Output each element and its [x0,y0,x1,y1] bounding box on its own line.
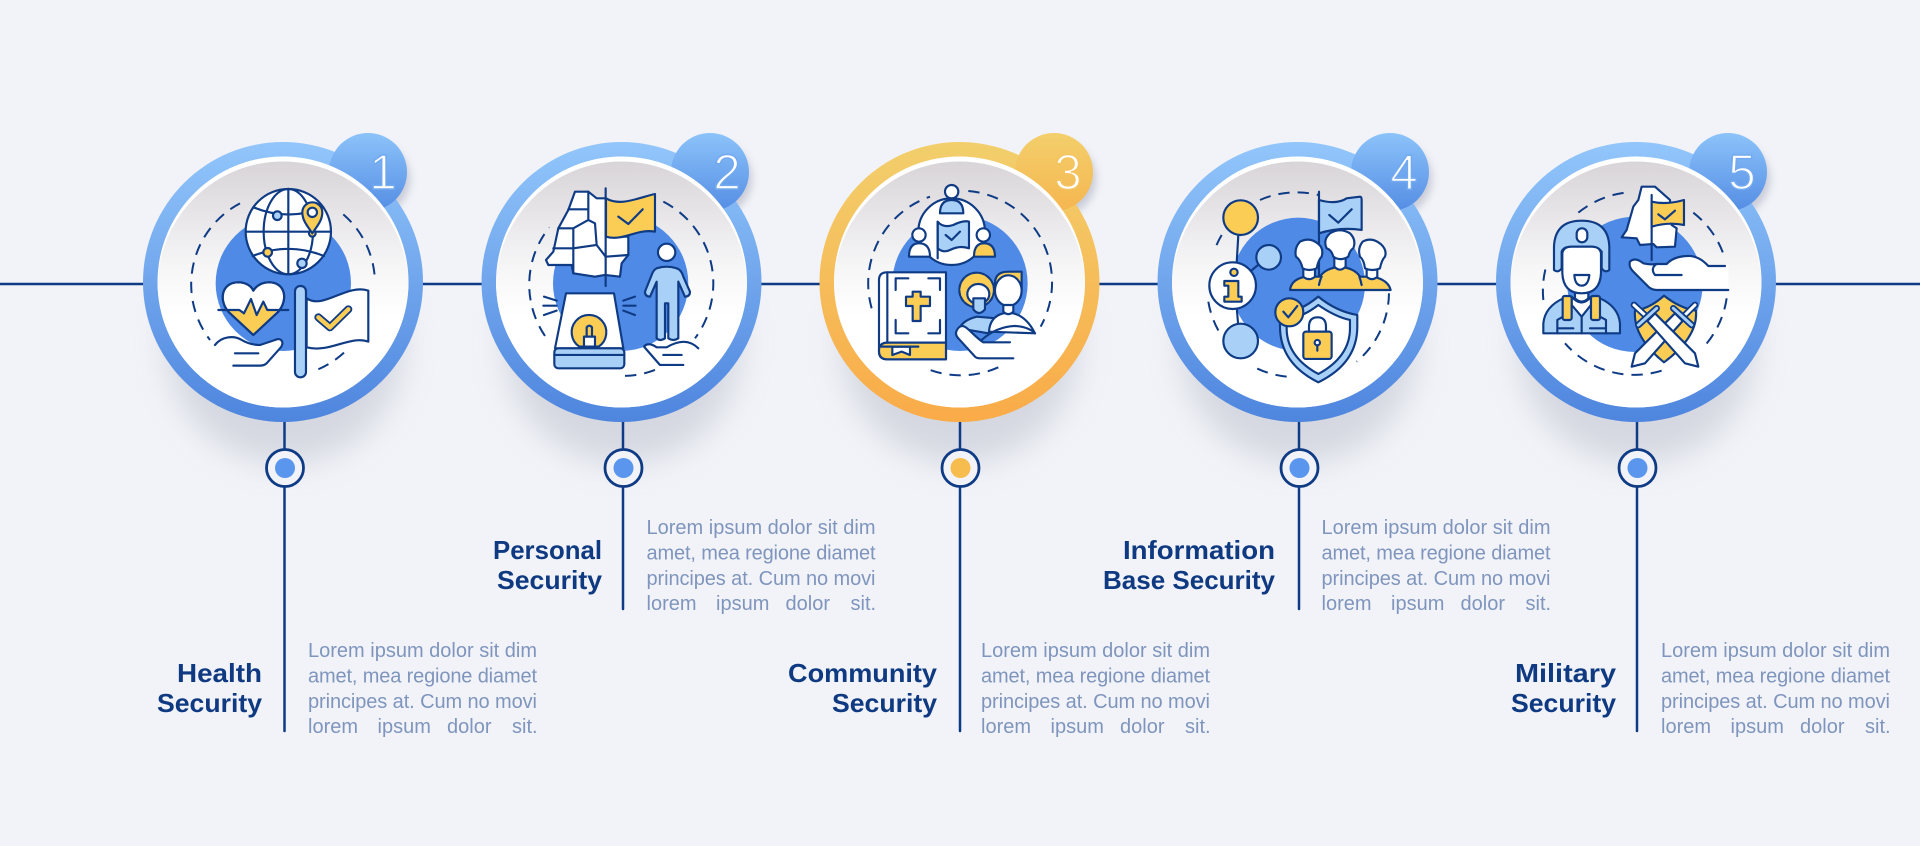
description: lorem [981,716,1031,738]
outer ring [1496,142,1776,422]
title: Security [157,688,263,718]
description: principes at. Cum no movi [981,691,1210,713]
inner disc [496,156,747,412]
icon: info network, people and shield [1208,192,1391,382]
title: Community [788,658,938,688]
panel: Military Security [1496,133,1891,738]
description: lorem [308,716,358,738]
title [1511,658,1617,718]
stem line [1298,420,1300,609]
title: Information [1123,535,1275,565]
panel: Information Base Security [1103,133,1551,615]
inner disc [1172,156,1423,412]
description: sit. [512,716,538,738]
description: amet, mea regione diamet [646,542,876,564]
title [157,658,263,718]
number badge [1689,133,1767,211]
description: dolor [1800,716,1845,738]
node marker [1281,450,1318,486]
number 4: 4 [1390,146,1418,200]
node marker [605,450,642,486]
title [788,658,938,718]
description [1661,640,1891,738]
description: principes at. Cum no movi [1661,691,1890,713]
icon: soldier, map and swords [1543,187,1728,375]
icon: community, bible and people [868,185,1052,375]
description: dolor [786,593,830,615]
description: ipsum [1391,593,1444,615]
outer ring [482,142,762,422]
title: Personal [493,535,602,565]
drop shadow [505,227,741,463]
number badge [1015,133,1093,211]
number 5: 5 [1728,146,1756,200]
title: Health [177,658,262,688]
description: sit. [1526,593,1551,615]
description: ipsum [716,593,769,615]
number badge [671,133,749,211]
description: ipsum [1050,716,1104,738]
description: Lorem ipsum dolor sit dim [1322,517,1550,539]
node marker [942,450,979,486]
node marker [1619,450,1656,486]
description: dolor [1460,593,1505,615]
number 2: 2 [713,146,741,200]
description: sit. [1865,716,1891,738]
title: Military [1515,658,1617,688]
panel: Personal Security [482,133,876,615]
description: amet, mea regione diamet [308,666,537,688]
drop shadow [842,227,1078,463]
description: principes at. Cum no movi [1322,568,1550,590]
description [981,640,1211,738]
stem line [1636,420,1638,731]
description: dolor [447,716,492,738]
inner disc [158,156,408,412]
description: sit. [850,593,876,615]
description: Lorem ipsum dolor sit dim [308,640,537,662]
description: lorem [1661,716,1711,738]
stem line [622,420,624,609]
description: amet, mea regione diamet [1322,542,1551,564]
icon: map, siren and person [529,188,713,376]
title: Security [1511,688,1617,718]
outer ring [1158,142,1438,422]
drop shadow [1181,227,1417,463]
badge shadow [336,142,410,216]
description: lorem [1322,593,1372,615]
description [1322,517,1551,615]
title: Security [832,688,938,718]
badge shadow [1022,142,1096,216]
description: Lorem ipsum dolor sit dim [1661,640,1890,662]
stem line [959,420,961,731]
number badge [329,133,407,211]
drop shadow [1519,227,1755,463]
description: dolor [1120,716,1165,738]
number 1: 1 [369,146,397,200]
title [1103,535,1276,595]
description: lorem [646,593,697,615]
drop shadow [167,227,403,463]
outer ring [820,142,1100,422]
badge shadow [678,142,752,216]
description [646,517,876,615]
panel: Health Security [143,133,538,738]
inner disc [1510,156,1762,412]
number 3: 3 [1054,146,1082,200]
description: principes at. Cum no movi [646,568,876,590]
panel: Community Security [788,133,1211,738]
stem line [283,420,286,731]
description: sit. [1185,716,1211,738]
icon: globe, heart and flag [191,189,375,377]
horizontal connector line [0,283,1920,285]
badge shadow [1358,142,1432,216]
description: amet, mea regione diamet [1661,666,1890,688]
description: ipsum [378,716,431,738]
description: amet, mea regione diamet [981,666,1210,688]
description: principes at. Cum no movi [308,691,537,713]
title [493,535,603,595]
title: Security [497,565,603,595]
description [308,640,538,738]
description: ipsum [1730,716,1784,738]
title: Base Security [1103,565,1276,595]
inner disc [834,156,1085,412]
number badge [1351,133,1429,211]
node marker [266,450,304,486]
badge shadow [1696,142,1770,216]
description: Lorem ipsum dolor sit dim [981,640,1210,662]
description: Lorem ipsum dolor sit dim [646,517,876,539]
outer ring [143,142,423,422]
